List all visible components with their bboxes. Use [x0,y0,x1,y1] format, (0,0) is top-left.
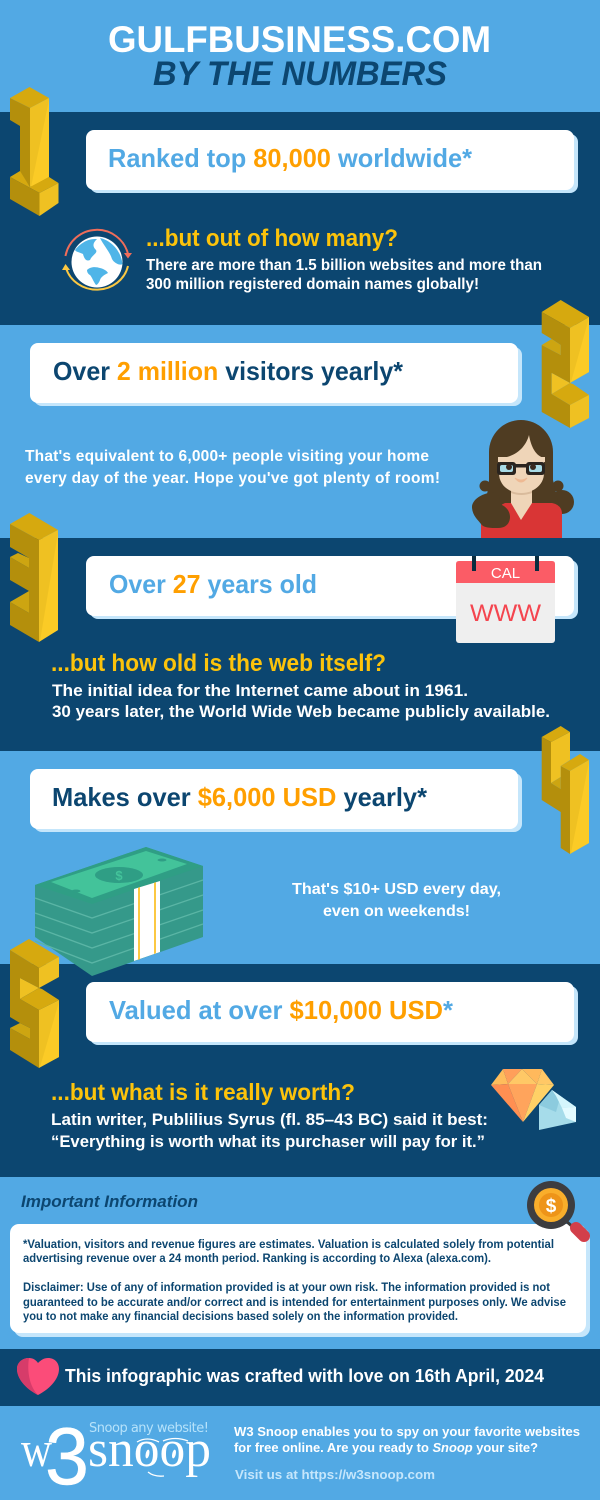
heading: how old is the web: ...but how old is the web itself? [51,650,386,677]
text: about w3snoop: for free online. Are you ready to Snoop your site? [234,1440,538,1455]
text: web history: 30 years later, the World Wide Web became publicly available. [52,703,550,721]
card: makes over $6,000: Makes over $6,000 USD yearly* [52,782,428,812]
card: over 2 million visitors [30,343,522,406]
card: disclaimer: Disclaimer: Use of any of information provided is at your own risk. The information provided is not [23,1280,550,1294]
icon: calendar [456,556,555,643]
icon: stack of money [35,847,203,976]
icon: magnifying glass with dollar: $ [546,1196,557,1217]
heading: important information: Important Information [21,1192,198,1211]
icon: globe with arrows [62,230,132,290]
text: ten dollars a day: even on weekends! [323,903,470,920]
text: website counts: There are more than 1.5 billion websites and more than [146,257,542,274]
logo: w3snoop: w [21,1421,52,1477]
logo: w3snoop: 3 [45,1412,89,1500]
icon: heart [17,1358,59,1395]
text: website counts [146,257,542,293]
icon: magnifying glass with dollar [527,1181,584,1236]
link: visit w3snoop: Visit us at https://w3snoop.com [235,1467,435,1482]
numeral 2 [542,300,589,428]
card: ranked top 80,000: Ranked top 80,000 worldwide* [108,143,473,173]
text: Publilius Syrus quote: Latin writer, Publilius Syrus (fl. 85–43 BC) said it best: [51,1111,488,1129]
title [108,19,491,93]
text: equivalent visitors: every day of the year. Hope you've got plenty of room! [25,470,440,487]
text: web history [52,682,550,721]
card: disclaimer: advertising revenue over a 24 month period. Ranking is according to Alexa (alexa.com). [23,1251,491,1265]
card: over 27 years old [86,556,578,619]
card: ranked top 80,000 [86,130,578,193]
text: Publilius Syrus quote [51,1111,488,1151]
icon: woman with glasses [472,420,574,538]
banner: crafted with love [17,1358,545,1395]
card: over 27 years old: Over 27 years old [109,569,317,599]
card: over 2 million visitors: Over 2 million visitors yearly* [53,356,404,386]
heading: but out of how many: ...but out of how many? [146,225,398,252]
title: GULFBUSINESS.COM [108,19,491,60]
text: about w3snoop: W3 Snoop enables you to spy on your favorite websites [234,1424,580,1439]
text: equivalent visitors [25,448,440,487]
card: disclaimer: guaranteed to be accurate and/or correct and is intended for entertainment purposes only. We advise [23,1295,566,1309]
card: valued at over $10,000: Valued at over $10,000 USD* [109,995,454,1025]
numeral 4 [542,726,589,854]
logo: w3snoop: snoop [88,1421,211,1478]
text: about w3snoop [234,1424,580,1455]
panel: revenue [30,726,589,976]
card: disclaimer: *Valuation, visitors and revenue figures are estimates. Valuation is calculated solely from potential [23,1237,554,1251]
footer: w3snoop [21,1412,580,1500]
icon: stack of money: $ [115,868,123,883]
title: BY THE NUMBERS [153,55,447,93]
panel: important information [10,1181,590,1337]
panel: value [10,939,578,1151]
card: disclaimer [10,1224,590,1337]
panel: age [10,513,578,721]
text: ten dollars a day: That's $10+ USD every day, [292,881,501,898]
panel: visitors [25,300,589,538]
logo: w3snoop [21,1412,211,1500]
logo: w3snoop: Snoop any website! [89,1421,209,1436]
icon: diamonds [491,1069,576,1130]
text: Publilius Syrus quote: “Everything is worth what its purchaser will pay for it.” [51,1133,485,1151]
card: valued at over $10,000 [86,982,578,1045]
text: ten dollars a day [292,881,501,920]
heading: what is it really worth: ...but what is it really worth? [51,1079,355,1105]
numeral 5 [10,939,59,1068]
text: website counts: 300 million registered domain names globally! [146,276,479,293]
card: disclaimer: you to not make any financial decisions based solely on the information provided. [23,1309,458,1323]
text: crafted date: This infographic was crafted with love on 16th April, 2024 [65,1365,545,1386]
card: makes over $6,000 [30,769,522,832]
icon: calendar: CAL [491,565,520,582]
text: equivalent visitors: That's equivalent to 6,000+ people visiting your home [25,448,429,465]
icon: calendar: WWW [470,600,541,627]
panel: rank [10,87,578,293]
numeral 1 [10,87,58,216]
numeral 3 [10,513,58,642]
text: web history: The initial idea for the Internet came about in 1961. [52,682,468,700]
